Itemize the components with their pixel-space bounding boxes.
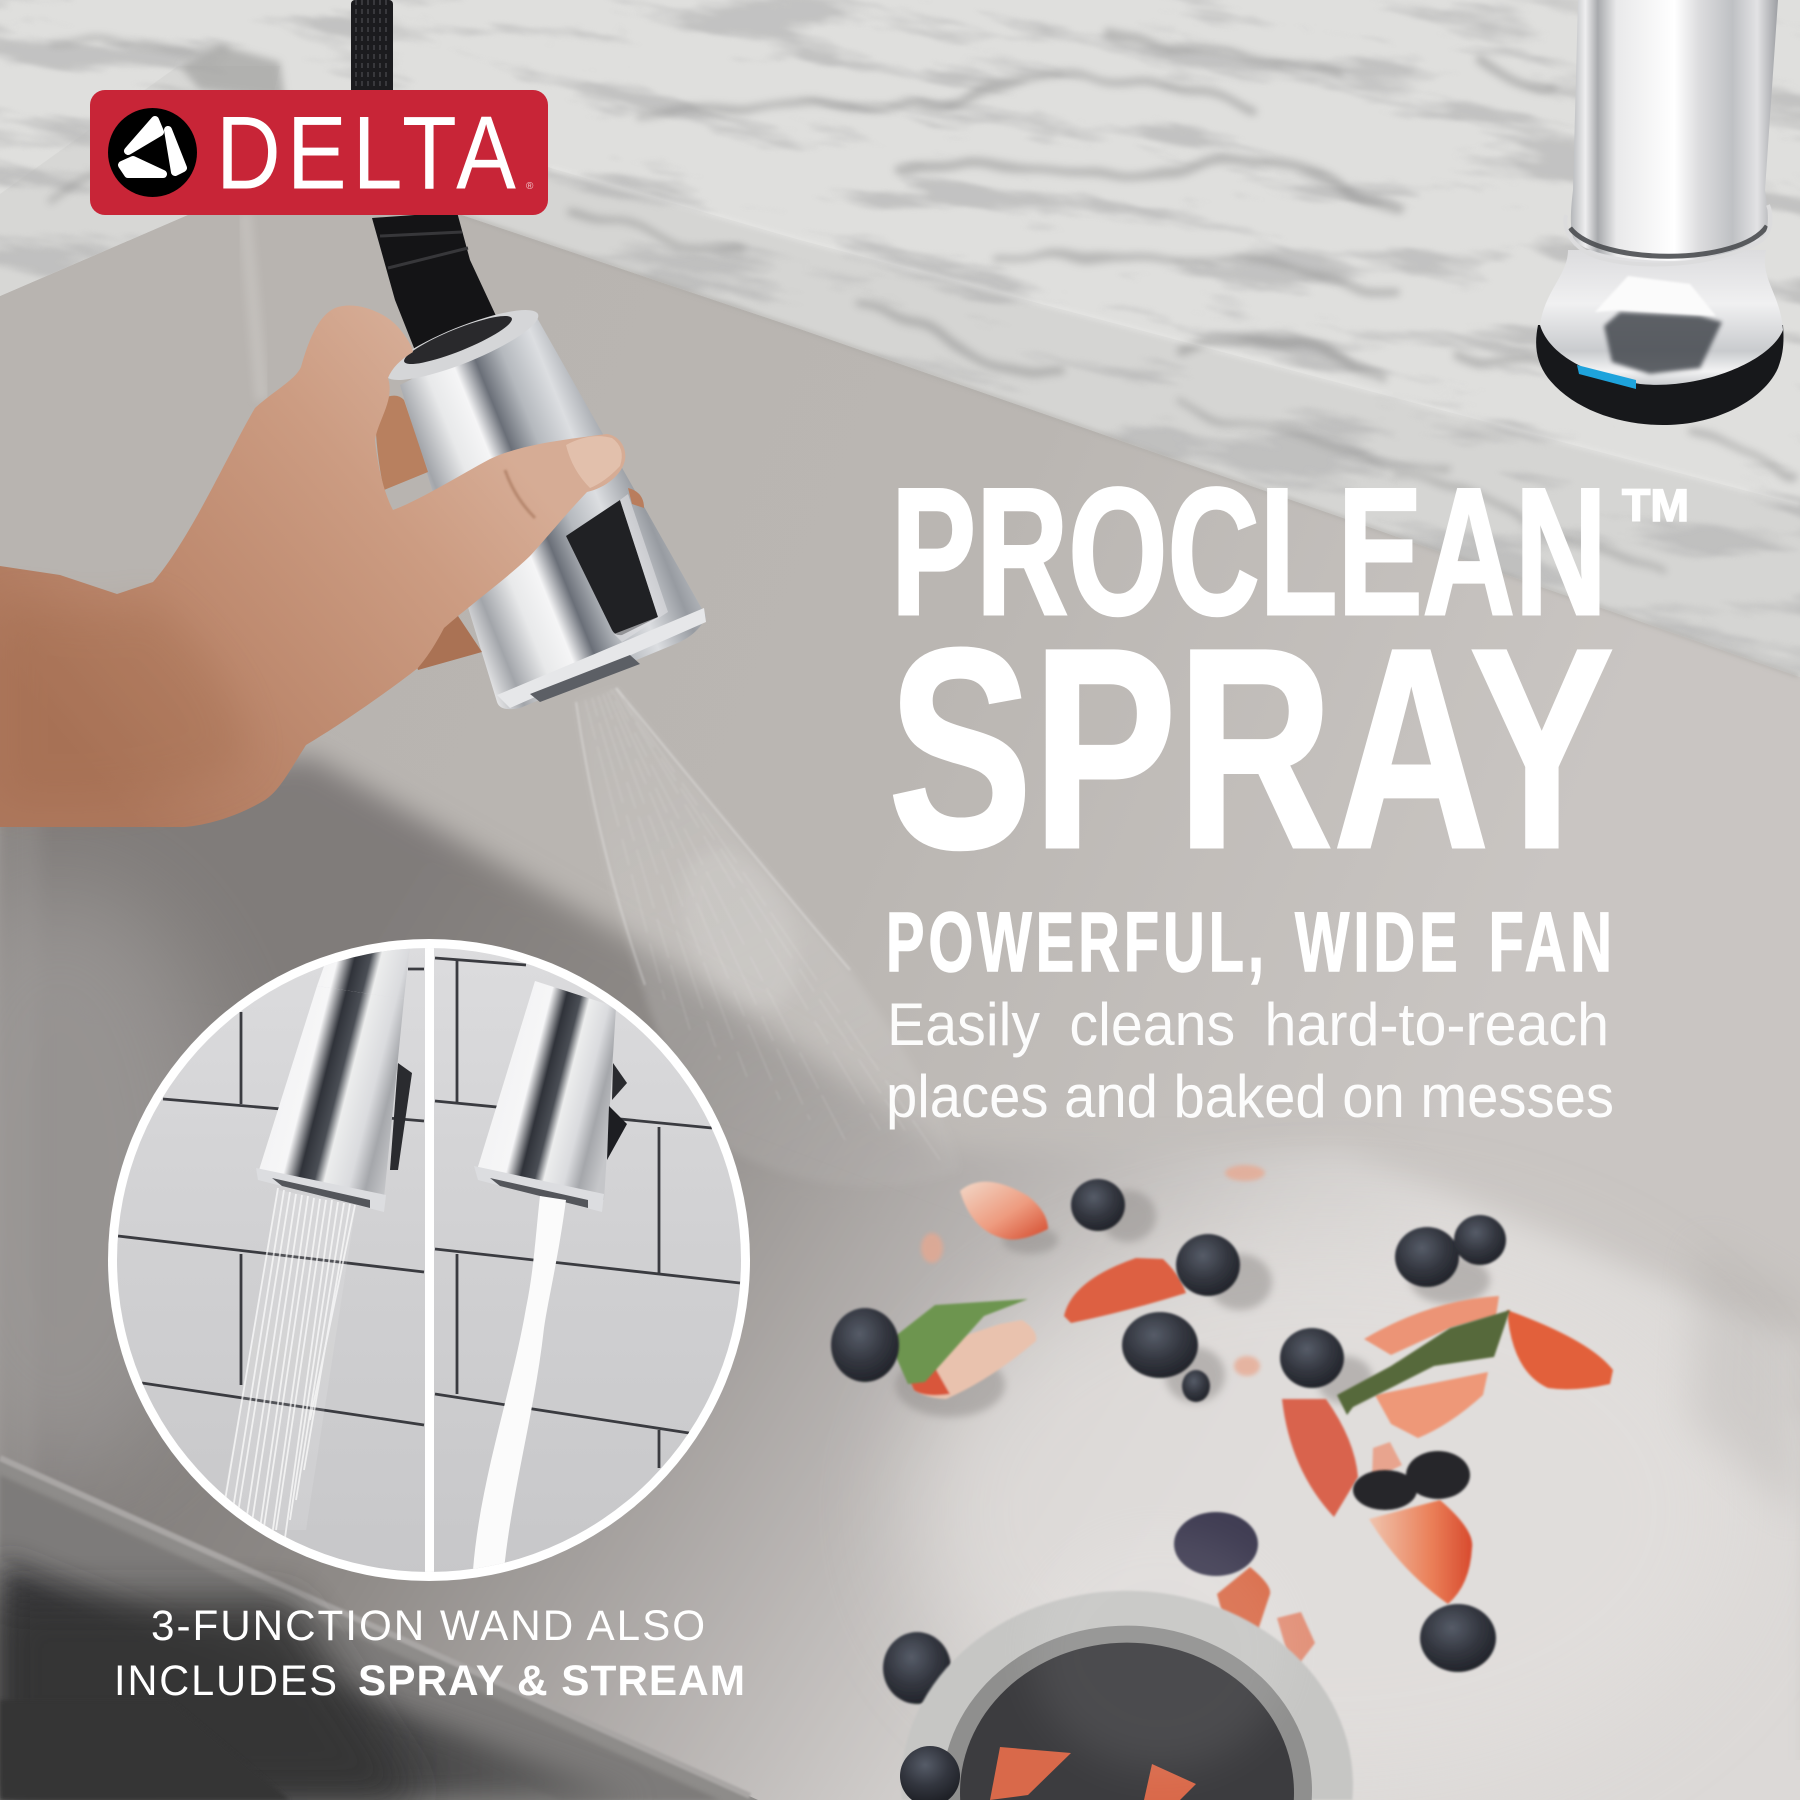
floor bottom fill — [0, 1760, 1800, 1800]
sink corner crease — [245, 214, 262, 400]
faucet chrome flare — [1540, 250, 1783, 385]
hand and arm — [0, 305, 644, 827]
hand shadow — [0, 600, 250, 803]
logo mark — [108, 108, 197, 197]
chrome reflection — [1604, 312, 1722, 374]
drain — [900, 1591, 1353, 1800]
inset tile grout — [118, 958, 740, 1468]
ring finger — [410, 595, 482, 670]
inset: spray and stream comparison — [108, 930, 750, 1590]
spray wand, left — [218, 945, 412, 1556]
water stream — [473, 1196, 566, 1570]
wand cone — [400, 316, 706, 709]
middle finger — [375, 396, 428, 490]
marble veins — [50, 30, 1800, 570]
description: places and baked on messes — [886, 1063, 1614, 1130]
stream wand, right — [473, 981, 627, 1570]
caption — [114, 1602, 746, 1705]
berry shadows — [895, 1190, 1490, 1417]
description: Easily cleans hard-to-reach — [887, 991, 1609, 1058]
sink corner shadow — [180, 45, 285, 100]
faucet column — [1571, 0, 1778, 261]
wand bottom rim — [497, 608, 706, 708]
faucet black base — [1536, 325, 1783, 425]
wand button — [566, 500, 658, 635]
counter edge highlight — [551, 168, 1800, 505]
faucet collar — [1570, 226, 1767, 256]
spill stains — [921, 1165, 1265, 1376]
palm and thumb — [0, 305, 625, 827]
counter left face — [0, 66, 280, 296]
water spray fan — [576, 688, 960, 1187]
description — [886, 991, 1614, 1130]
logo badge — [90, 90, 548, 215]
caption: INCLUDES — [114, 1657, 339, 1705]
wand neck — [372, 212, 497, 358]
fan outer streaks — [576, 702, 645, 985]
marble texture — [0, 0, 1800, 676]
blueberries — [831, 1179, 1506, 1704]
wand top disc — [379, 298, 545, 392]
caption: SPRAY & STREAM — [358, 1657, 746, 1705]
spray haze over fruit — [1030, 1530, 1290, 1770]
spray jets — [220, 1188, 355, 1556]
divider — [425, 930, 434, 1590]
marble countertop — [0, 0, 1800, 677]
ledge: sink front edge — [0, 1458, 758, 1800]
floor underlay — [40, 1000, 1800, 1800]
caption: 3-FUNCTION WAND ALSO — [151, 1602, 707, 1650]
strawberry leaves — [889, 1299, 1028, 1384]
counter front face — [300, 90, 1800, 677]
sink floor — [0, 756, 1800, 1790]
title: PROCLEAN: TM — [1622, 480, 1689, 531]
knuckle shading — [505, 470, 535, 518]
fan droplet streaks — [585, 688, 940, 1160]
drain strawberries — [990, 1747, 1071, 1800]
registered mark: ® — [526, 181, 534, 192]
faucet blue light — [1577, 365, 1636, 389]
hose — [351, 0, 393, 95]
thumbnail — [566, 436, 622, 488]
spray wand — [372, 212, 706, 709]
left floor glow — [0, 880, 230, 1480]
inset tile background — [108, 939, 750, 1581]
logo wordmark: DELTA — [216, 96, 522, 212]
strawberries and blueberries — [831, 1165, 1613, 1704]
strawberry slices — [900, 1182, 1613, 1672]
faucet base — [1536, 0, 1783, 425]
floor highlight — [910, 1230, 1750, 1790]
far fingertip — [628, 488, 644, 508]
corner shadow — [1690, 1240, 1800, 1520]
floor left edge fill — [0, 800, 40, 1800]
